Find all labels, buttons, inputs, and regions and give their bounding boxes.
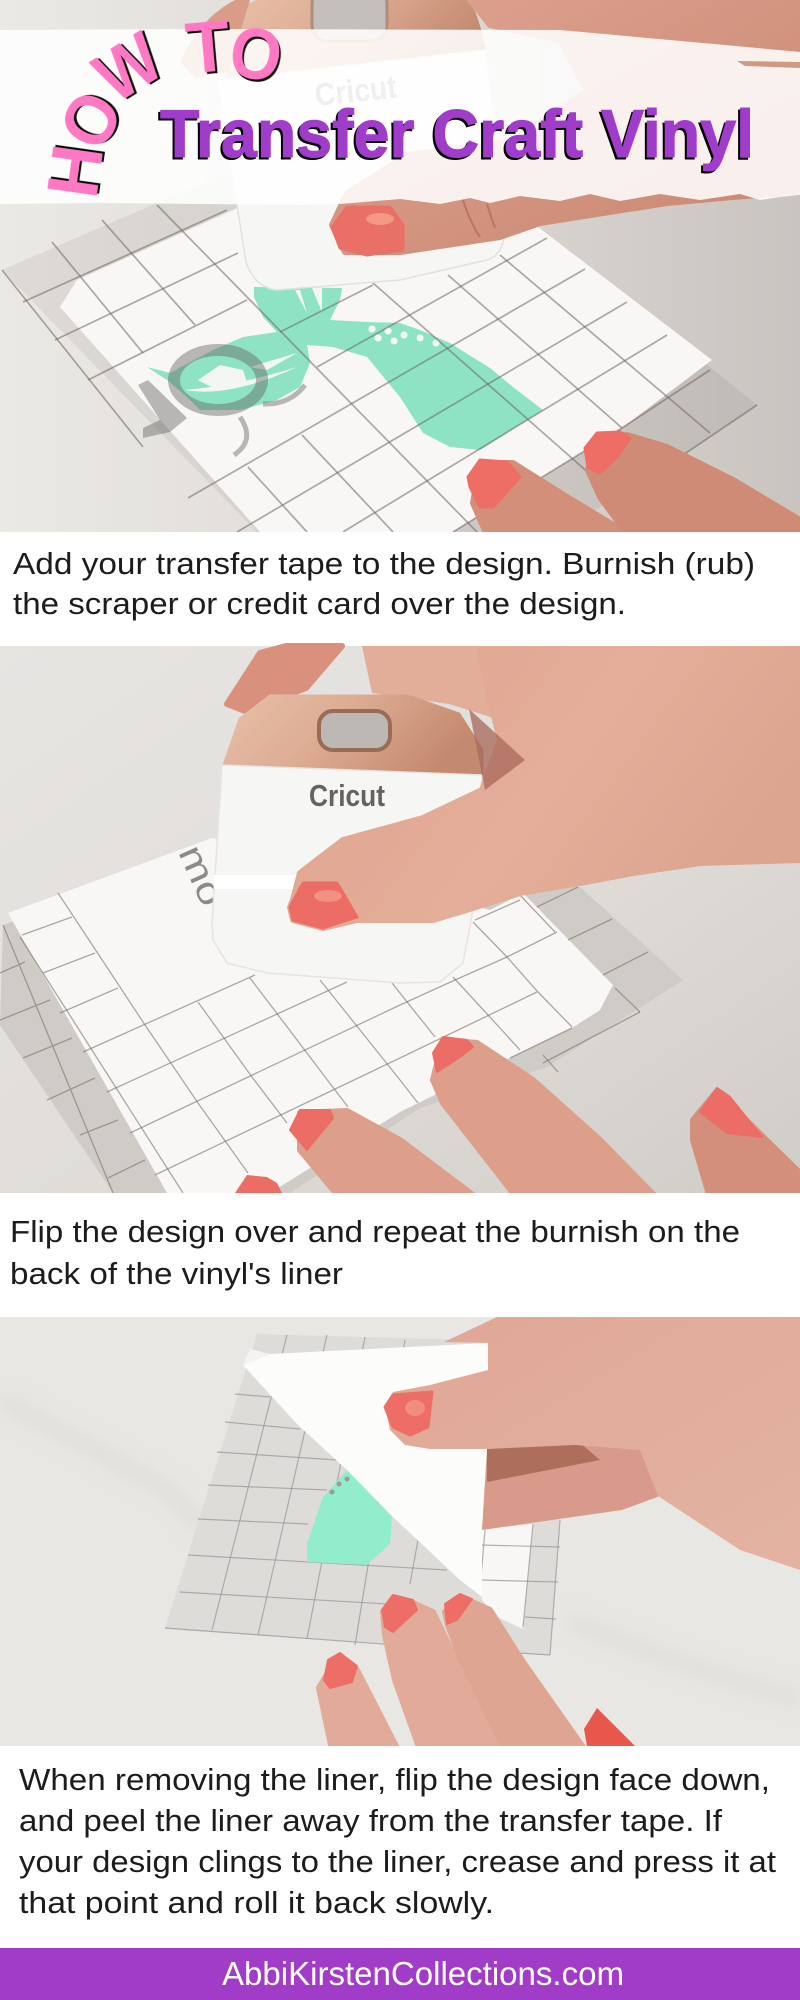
grey ring [174,350,262,410]
photo 1 scraper rose gold top [225,0,486,78]
photo 2 grid lines [0,887,648,1193]
photo 3 teal tail piece [307,1470,392,1565]
caption 3 line 2: and peel the liner away from the transfer tape. If [19,1803,722,1838]
photo 1 grey mirrored lettering [138,350,305,455]
panel: photo 1, burnishing the transfer tape [0,0,800,542]
title arched How To [33,6,288,202]
photo 1 teal mermaid tail [147,287,543,450]
caption 3 background [0,1746,800,1948]
photo 3 far finger nail [584,1708,635,1746]
banner skin colored tear [737,61,800,68]
photo 3 finger centre [383,1598,505,1750]
photo 2 finger right [693,1091,800,1198]
photo 3 marble veins [0,1400,800,1700]
photo 3 small paper corner [243,1349,270,1365]
tail fill [147,287,543,450]
footer bar [0,1948,800,2000]
text block: step 2 caption [0,1193,800,1317]
title main line: Transfer Craft Vinyl [160,96,754,172]
caption 3 line 1: When removing the liner, flip the design face down, [19,1762,770,1797]
photo 3 cutting mat [165,1334,561,1655]
photo 3 white peeled liner flap [243,1343,488,1597]
tail dots [372,329,436,343]
caption 3 line 4: that point and roll it back slowly. [19,1885,494,1920]
photo 3 thumb nail [385,1392,432,1435]
photo 1 left finger [180,0,250,78]
text block: step 1 caption [0,532,800,646]
photo 1 thumb nail [332,207,403,255]
panel: photo 2, burnishing the liner [0,646,800,1198]
photo 1 finger nail left [468,460,520,507]
photo 1 grid lines [2,205,757,532]
caption 2 background [0,1193,800,1317]
letter O: O [43,78,139,162]
photo 3 hand with thumb [385,1317,800,1570]
photo 2 marble background [0,646,800,1193]
footer website url: AbbiKirstenCollections.com [222,1955,624,1992]
photo 2 cutting mat [0,850,683,1193]
grey letter fragment [138,380,187,438]
grey curl [234,385,305,455]
tail white eye highlight [198,365,247,390]
photo 2 finger centre [433,1040,657,1198]
photo 1 scraper hole [312,0,387,41]
photo 1 scraper white body [217,50,505,290]
photo 1 nail glitter [366,213,394,225]
photo 1 thumb wrinkles [463,200,495,237]
photo 3 finger gap shadow [487,1443,600,1482]
photo 2 nails [290,1037,762,1150]
photo 2 white paper [8,838,613,1193]
photo 3 grid lines [165,1335,560,1655]
photo 3 nail glitter [405,1400,425,1416]
photo 2 scraper highlight [214,875,304,889]
caption 2 line 1: Flip the design over and repeat the burnish on the [10,1214,740,1249]
photo 3 marble background [0,1317,800,1746]
photo 2 finger left [300,1111,477,1198]
photo 1 white torn banner [0,29,800,205]
photo 1 white transfer paper [60,130,712,532]
photo 3 lower paper [482,1524,533,1629]
photo 2 finger bottom nail [235,1175,282,1193]
title: How To Transfer Craft Vinyl [33,6,754,202]
photo 2 faint lettering: mo [171,839,233,912]
photo 3 tail dots [332,1479,347,1492]
photo 2 scraper hole [319,711,390,750]
photo 1 cutting mat [2,100,757,532]
photo 2 hand and thumb [290,649,800,928]
letter T: T [183,6,233,90]
photo 2 index finger [227,646,342,711]
photo 3 finger left [319,1657,398,1750]
photo 2 palm shadow [469,709,525,790]
photo 1 hand and thumb [332,0,800,252]
letter W: W [80,16,177,118]
photo 2 scraper rose gold top [224,696,482,775]
photo 1 Cricut logo: Cricut [313,69,399,113]
photo 3 finger right [445,1597,585,1750]
letter O second: O [224,10,288,98]
panel: photo 3, peeling the liner [0,1317,800,1750]
photo 2 scraper white body [212,765,482,983]
tail white stripes [185,288,322,392]
photo 1 finger right [588,435,800,542]
letter H: H [33,140,119,202]
caption 1 background [0,532,800,646]
photo 1 marble background [0,0,800,532]
caption 2 line 2: back of the vinyl's liner [10,1256,343,1291]
caption 1 line 2: the scraper or credit card over the design. [13,586,626,621]
photo 2 thumb nail [290,883,357,928]
photo 3 nails [324,1594,472,1688]
photo 2 nail glitter [314,890,342,902]
photo 1 finger nail right [585,432,630,473]
footer background [0,1948,800,2000]
photo 2 second finger behind scraper [362,646,500,720]
photo 3 lower hand fingers behind [482,1440,660,1530]
photo 1 finger left [473,463,630,535]
caption 1 line 1: Add your transfer tape to the design. Burnish (rub) [13,546,755,581]
text block: step 3 caption [0,1746,800,1948]
photo 2 Cricut logo: Cricut [309,778,385,813]
caption 3 line 3: your design clings to the liner, crease and press it at [19,1844,776,1879]
